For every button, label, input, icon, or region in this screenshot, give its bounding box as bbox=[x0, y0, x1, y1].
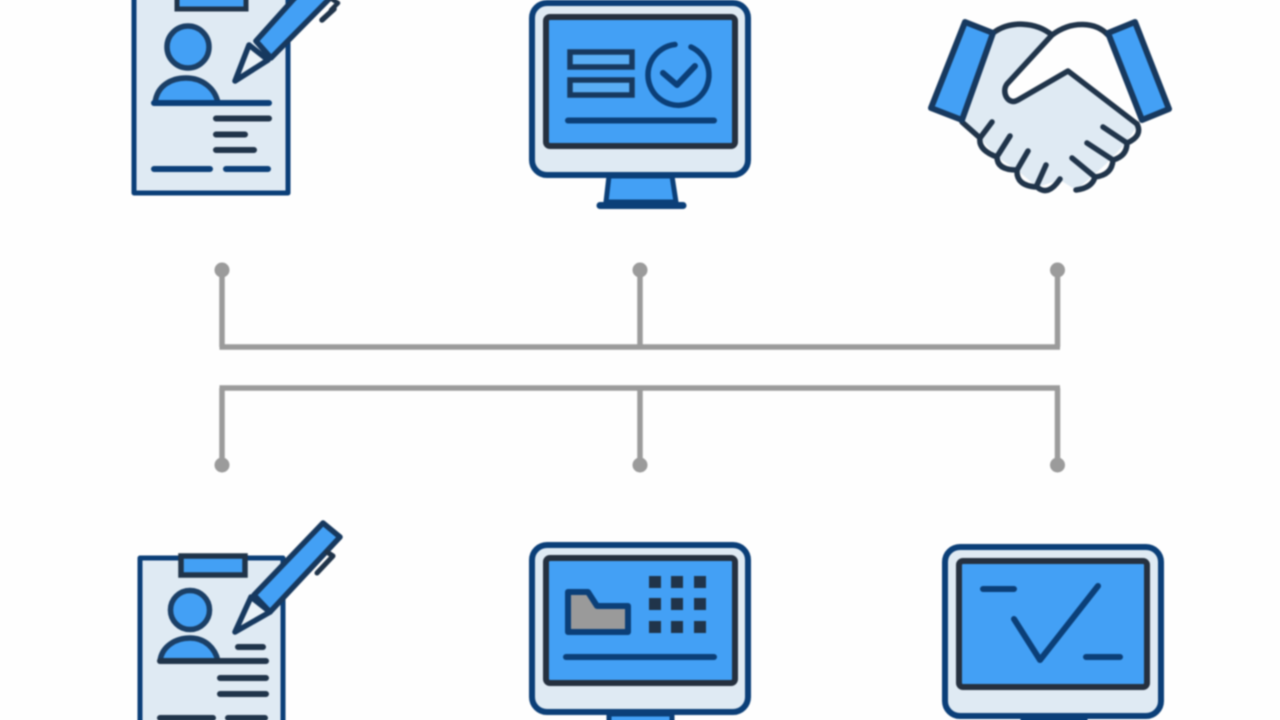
icon: handshake (top right) bbox=[931, 22, 1169, 191]
icon: monitor with form and check (top centre) bbox=[532, 3, 748, 206]
icon: monitor with folder and grid (bottom centre) bbox=[532, 545, 748, 720]
connector: top bracket bbox=[214, 262, 1065, 347]
icon grid bbox=[649, 576, 706, 633]
icon: monitor with large check (bottom right) bbox=[945, 547, 1161, 720]
icon: document with pen (top left) bbox=[134, 0, 338, 193]
icon: clipboard with pen (bottom left) bbox=[140, 523, 340, 720]
connector: bottom bracket bbox=[214, 388, 1065, 472]
